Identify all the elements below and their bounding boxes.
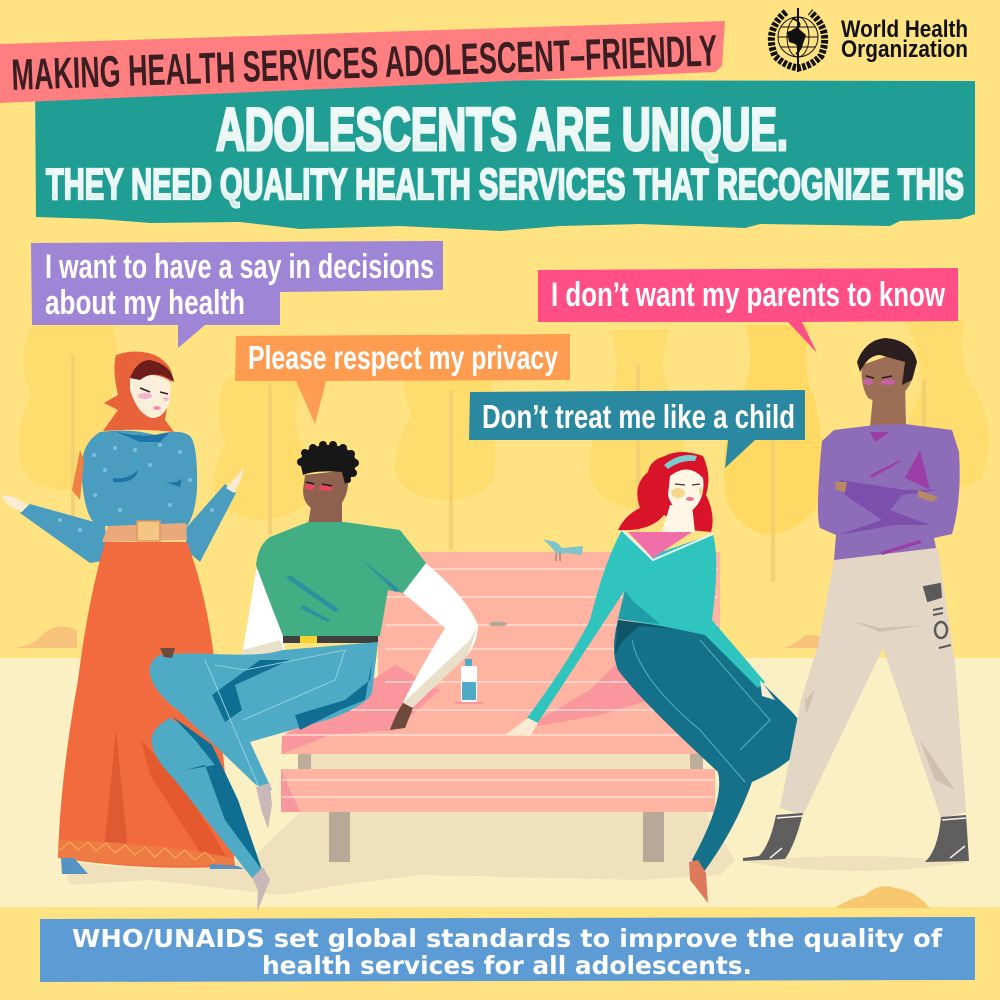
WHO logo — [771, 8, 968, 72]
header banner — [0, 21, 725, 103]
skirt — [58, 542, 235, 868]
neck — [308, 500, 342, 525]
sweater — [527, 530, 765, 724]
footer panel — [40, 917, 975, 982]
emblem — [771, 8, 825, 72]
blush — [305, 484, 315, 490]
belt — [102, 523, 187, 542]
speech bubble: have a say — [31, 241, 443, 348]
bench — [281, 552, 720, 862]
organization name: World Health — [841, 16, 968, 43]
neck — [662, 505, 695, 532]
bench front slat — [281, 769, 715, 812]
t-shirt — [256, 522, 426, 636]
speech bubble: child — [469, 390, 805, 468]
footer panel: WHO/UNAIDS set global standards to improve the quality of — [72, 924, 943, 953]
hair — [857, 338, 917, 385]
sweatshirt — [818, 424, 960, 560]
blush — [863, 379, 873, 385]
bench legs — [329, 812, 350, 862]
headband — [664, 455, 697, 469]
seated woman — [505, 452, 805, 903]
scarf — [103, 352, 174, 432]
hands — [505, 718, 538, 736]
distant hills — [15, 626, 825, 648]
trouser print — [924, 584, 951, 648]
trees — [19, 320, 989, 582]
blush — [138, 393, 152, 399]
boots — [743, 813, 803, 861]
sweater — [81, 431, 197, 526]
speech bubble: child: Don’t treat me like a child — [482, 398, 795, 435]
foreground hill — [835, 886, 930, 908]
hand — [390, 703, 413, 730]
bench smudge — [489, 622, 507, 626]
rear leg — [151, 718, 262, 878]
shoes — [256, 783, 272, 829]
bench shadows — [282, 665, 440, 754]
seated man — [150, 441, 478, 912]
footer panel: health services for all adolescents. — [262, 951, 752, 980]
head — [862, 350, 915, 401]
face — [668, 469, 703, 512]
hair — [297, 441, 359, 484]
arms — [20, 504, 108, 563]
pink top — [628, 532, 692, 558]
jeans — [614, 620, 805, 873]
front leg — [150, 642, 378, 790]
woman with headscarf — [1, 352, 244, 874]
bird — [543, 539, 583, 561]
standing man — [743, 338, 969, 862]
title panel — [35, 80, 975, 231]
speech bubble: privacy — [235, 334, 570, 424]
speech bubble: privacy: Please respect my privacy — [248, 339, 558, 376]
speech bubble: have a say: I want to have a say in decisions — [45, 248, 434, 286]
speech bubble: have a say: about my health — [45, 284, 245, 322]
belt — [283, 636, 378, 643]
trousers — [780, 548, 966, 818]
head — [303, 470, 348, 512]
bench backrest and seat — [281, 552, 720, 754]
ground shadows — [62, 812, 968, 895]
shoes — [61, 858, 88, 874]
hands — [835, 482, 938, 502]
hair — [618, 452, 713, 532]
speech bubble: parents — [538, 268, 958, 353]
WHO logo: Organization — [841, 36, 968, 63]
bench rail — [300, 754, 700, 769]
neck — [870, 385, 906, 428]
shoe — [689, 860, 708, 903]
face — [130, 375, 171, 418]
water bottle — [455, 659, 483, 703]
ground — [0, 658, 1000, 907]
white sleeves — [242, 570, 285, 655]
hand on knee — [160, 648, 175, 658]
hair — [130, 360, 174, 382]
